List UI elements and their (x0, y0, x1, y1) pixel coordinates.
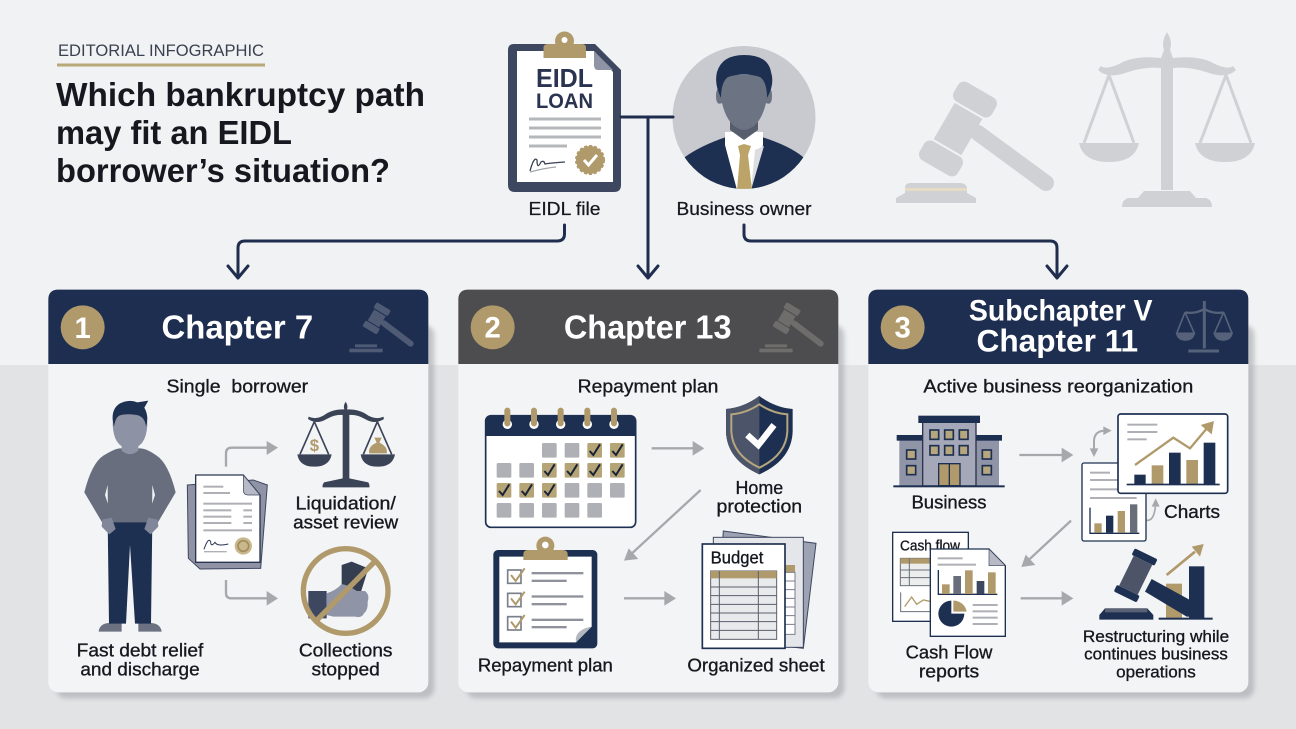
label: charts: Charts (1164, 501, 1220, 522)
label: restructuring: continues business (1084, 645, 1228, 664)
label: home protection: protection (716, 496, 802, 517)
connector: business owner to Subchapter V (744, 225, 1067, 278)
icon: calendar (486, 408, 636, 527)
title (56, 77, 425, 190)
icon: standing borrower (84, 401, 176, 632)
title: may fit an EIDL (56, 115, 292, 152)
label: collections stopped (299, 640, 392, 680)
header: Subchapter V Chapter 11: 3 (895, 312, 911, 345)
label: home protection (716, 477, 802, 517)
label: liquidation: asset review (293, 511, 399, 532)
header: Subchapter V Chapter 11 (868, 290, 1248, 364)
arrow: calendar to shield (652, 441, 704, 456)
icon: liquidation scales: $ (310, 436, 320, 455)
subtitle: Single borrower (166, 376, 308, 397)
label: fast debt relief: Fast debt relief (77, 640, 204, 661)
subtitle: Repayment plan (578, 376, 718, 397)
label: liquidation (293, 492, 399, 532)
icon: budget sheets (702, 531, 816, 648)
header: Subchapter V Chapter 11: Chapter 11 (976, 324, 1138, 359)
icon: cash flow reports (893, 532, 1005, 636)
icon: home protection shield (726, 396, 793, 474)
label: collections stopped: Collections (299, 640, 392, 661)
label: EIDL file: EIDL file (528, 199, 600, 219)
eyebrow label: EDITORIAL INFOGRAPHIC (58, 41, 264, 60)
arrow: charts to cash flow (1021, 521, 1071, 567)
icon: legal documents (187, 475, 267, 569)
header: Chapter 7: 1 (75, 312, 91, 345)
title: Which bankruptcy path (56, 77, 425, 114)
arrow: to liquidation (226, 441, 278, 467)
icon: business owner avatar (672, 46, 816, 195)
arrow: cash flow to restructuring (1021, 591, 1073, 606)
label: organized sheet: Organized sheet (687, 655, 825, 676)
icon: background gavel (896, 79, 1046, 203)
connector: shared line to Chapter 13 (621, 117, 673, 278)
icon: restructuring gavel and growth bars (1099, 544, 1213, 620)
label: repayment plan: Repayment plan (478, 655, 613, 676)
label: cash flow reports (906, 642, 993, 681)
icon: EIDL loan clipboard: EIDL (536, 63, 593, 93)
subtitle: Active business reorganization (923, 376, 1193, 397)
label: home protection: Home (735, 477, 783, 498)
arrow: to collections stopped (226, 580, 278, 606)
connector: EIDL file to Chapter 7 (228, 225, 564, 278)
label: restructuring: operations (1116, 662, 1196, 681)
icon: EIDL loan clipboard: LOAN (536, 90, 593, 113)
icon: collections stopped (303, 549, 388, 633)
header: Chapter 13 (458, 290, 838, 364)
label: collections stopped: stopped (311, 659, 380, 680)
icon: business building (893, 416, 1005, 487)
label: restructuring: Restructuring while (1083, 627, 1229, 646)
label: fast debt relief (77, 640, 204, 680)
label: business: Business (911, 492, 986, 513)
title: borrower’s situation? (56, 153, 390, 190)
arrow: business to charts (1019, 448, 1073, 462)
icon: liquidation scales (297, 402, 395, 487)
header: Chapter 13: 2 (485, 312, 501, 345)
icon: budget sheets: Budget (711, 547, 764, 567)
icon: cash flow reports: Cash flow (900, 538, 960, 554)
header: Subchapter V Chapter 11: Subchapter V (969, 295, 1153, 328)
label: business owner: Business owner (676, 198, 812, 219)
label: restructuring (1083, 627, 1229, 681)
icon: repayment clipboard (493, 537, 597, 648)
label: cash flow reports: reports (919, 660, 979, 681)
panel: Chapter 13 (458, 290, 844, 698)
header: Chapter 13: Chapter 13 (564, 309, 731, 346)
icon: EIDL loan clipboard (508, 32, 621, 192)
header: Chapter 7: Chapter 7 (161, 309, 313, 346)
header: Chapter 7 (48, 290, 428, 364)
panel: Chapter 7 (48, 290, 434, 698)
arrow: clipboard to budget (624, 591, 676, 606)
arrow: shield to clipboard (624, 490, 701, 561)
label: cash flow reports: Cash Flow (906, 642, 993, 663)
panel: Subchapter V Chapter 11 (868, 290, 1254, 698)
icon: background scales (1079, 32, 1255, 207)
label: liquidation: Liquidation/ (295, 492, 397, 513)
icon: charts (1082, 414, 1228, 541)
label: fast debt relief: and discharge (80, 659, 200, 680)
